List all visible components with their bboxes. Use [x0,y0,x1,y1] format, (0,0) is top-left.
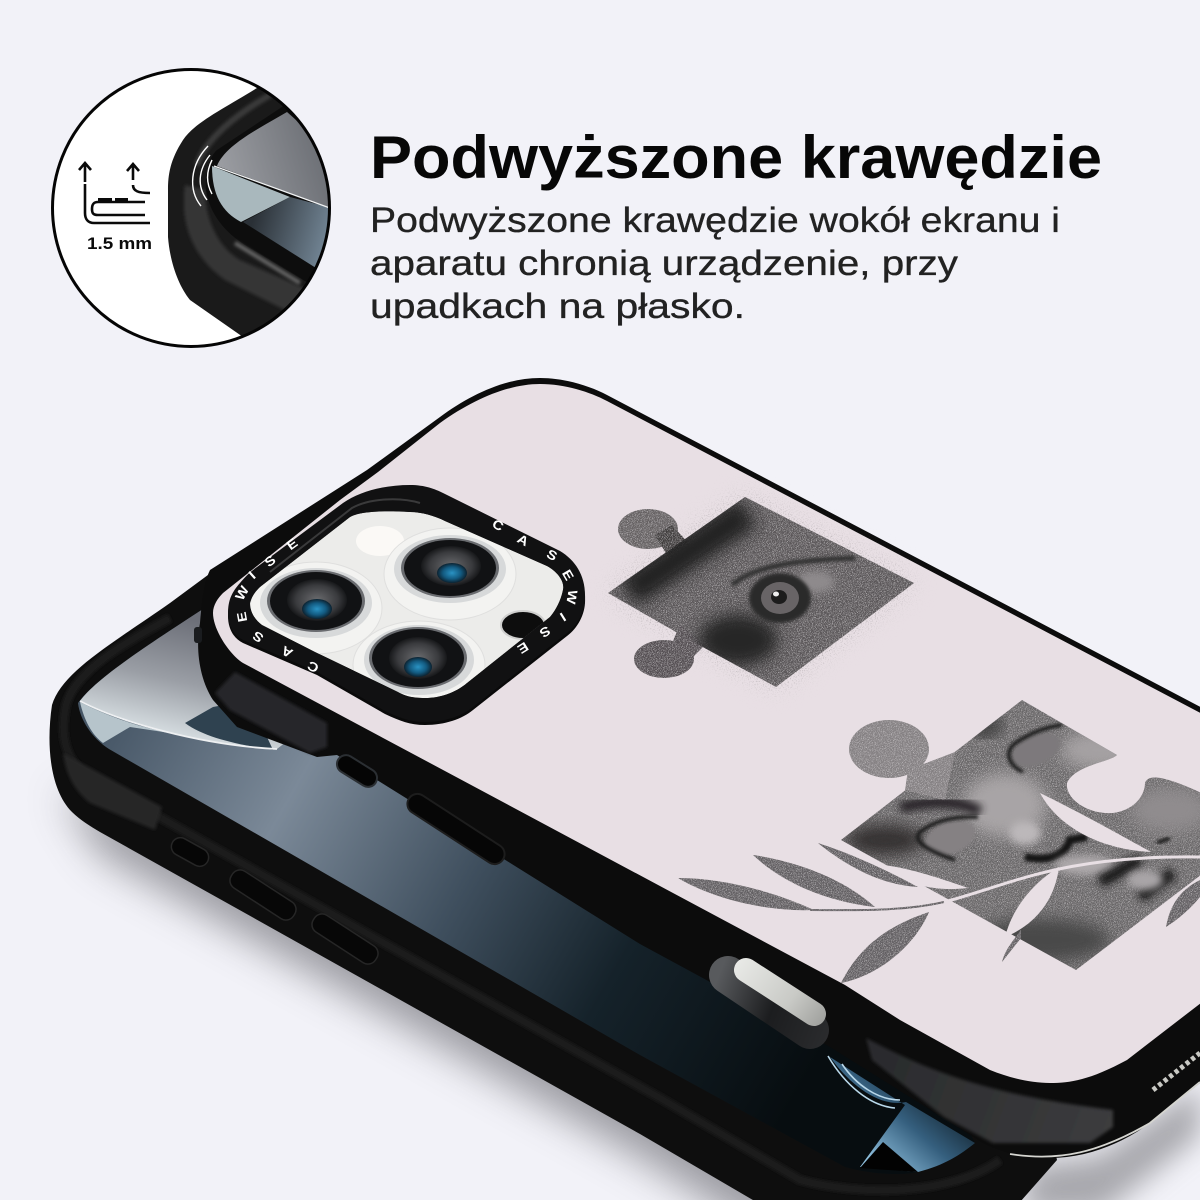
inset outline [52,70,330,346]
artwork: face puzzle piece [841,700,1200,970]
inset inner black lip [206,106,314,282]
upper phone body [198,378,1200,1158]
small side nub [194,627,202,643]
ring brand text: CASEWISE: W [563,589,581,606]
body text: upadkach na płasko. [370,287,745,326]
ring brand text: CASEWISE: C [305,658,321,676]
upper phone pink back [213,384,1200,1083]
pink cut-out leaves [883,793,1200,937]
inset screen dark blue [243,197,332,268]
artwork: leaf branch [678,793,1200,983]
eye piece body [608,497,914,687]
eye piece shading [628,512,778,666]
plate [250,511,564,698]
camera plate and lenses [250,511,564,698]
inset frame top band [197,95,270,165]
textured corner patch [63,753,162,830]
inset frame lit side [183,184,303,310]
inset phone corner [168,88,328,336]
microphone hole [501,611,545,639]
side button: action [168,834,212,870]
ring brand text: CASEWISE: I [557,610,569,625]
ring brand text: CASEWISE: W [232,582,252,603]
inset screen pale blue [212,166,290,222]
charging port housing [728,975,810,1030]
wallpaper arc lines [828,1056,900,1108]
dark swoosh [185,700,273,750]
ring brand text: CASEWISE: E [284,535,300,553]
ring brand text: CASEWISE: C [490,516,506,534]
inset highlight strip [235,243,300,283]
ring brand text: CASEWISE: E [559,567,577,583]
side power button [404,790,508,868]
ring brand text: CASEWISE: A [279,643,295,661]
case profile [85,184,150,223]
camera ring [228,485,585,722]
ring brand text: CASEWISE: S [537,623,553,641]
phone shadow [60,790,960,1200]
white swoosh line [80,701,277,749]
upper phone: back side [194,378,1200,1158]
bottom edge rim light [1010,1082,1200,1157]
lens: left [250,562,382,654]
ring brand text: CASEWISE [232,516,581,676]
inset screen grey [217,112,330,208]
inset impact arcs [193,146,212,206]
lens: bottom [352,620,486,698]
ring brand text: CASEWISE: I [245,568,258,582]
blue wallpaper shards [830,1057,975,1172]
side button: volume up [227,866,299,924]
ring brand text: CASEWISE: E [515,639,531,657]
lower phone frame [49,450,1057,1200]
ring brand text: CASEWISE: S [250,628,266,646]
raised edge diagram icon [79,163,150,223]
ring brand text: CASEWISE: S [544,546,560,564]
nose [1025,837,1087,859]
ring base depth [228,488,585,725]
phone profile [92,202,145,215]
screen grey wallpaper area [80,540,340,749]
ring inner lip [270,499,420,572]
body text: aparatu chronią urządzenie, przy [370,244,959,283]
lower phone screen [78,480,975,1174]
camera island [228,485,585,725]
diagram label: 1.5 mm [87,234,152,253]
flash [356,526,404,556]
shadow under bottom right corner [1020,1085,1200,1200]
inset frame outer [168,88,306,336]
upper eye [1010,732,1062,768]
charging port silver [746,970,814,1014]
lips [1100,860,1173,897]
lens: top [384,528,516,620]
textured corner patch: camera side [215,672,327,753]
title: Podwyższone krawędzie [370,124,1102,191]
arrow left [79,163,91,182]
lower phone: screen side up [49,450,1057,1200]
bottom right port grille [1153,1053,1200,1090]
inset circle: raised edge detail [52,60,340,350]
pale blue wedge [80,702,170,743]
frame highlight [64,618,1000,1190]
grey leaves [678,843,1200,983]
inset background [53,70,329,346]
eye drawing [732,558,855,623]
artwork: eye puzzle piece [608,497,914,687]
inset screen white line [214,166,330,208]
mute switch opening [334,752,380,790]
ring brand text: CASEWISE: S [261,552,278,570]
body text [370,201,1060,326]
face piece body [841,700,1200,970]
textured corner patch: bottom [866,1038,1113,1143]
arrow right [127,164,150,193]
ring brand text: CASEWISE: A [515,531,531,549]
side button: volume down [309,910,381,968]
eye piece spray [608,497,914,687]
black triangle in wallpaper [860,1142,918,1172]
body text: Podwyższone krawędzie wokół ekranu i [370,201,1060,240]
ring brand text: CASEWISE: E [234,611,250,623]
face shading [845,720,1200,962]
lower eye [924,820,976,856]
